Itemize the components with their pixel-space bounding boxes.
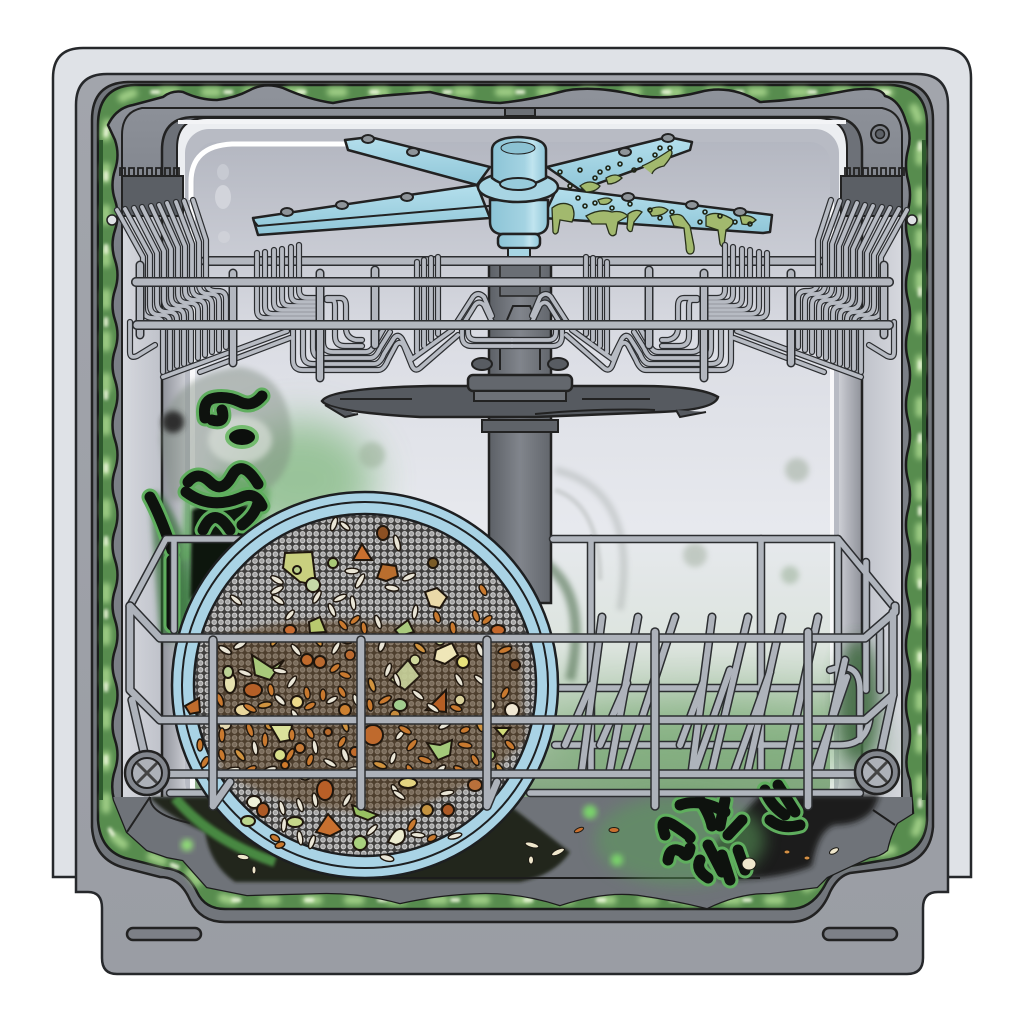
floor <box>112 795 912 910</box>
top right screw <box>871 125 889 143</box>
debris: large pieces <box>185 526 520 850</box>
floor food crumbs <box>237 826 840 874</box>
tub details inside clip <box>112 108 912 910</box>
upper left mold halo <box>150 367 292 640</box>
lower rack back and tines <box>130 539 893 793</box>
upper spray arm <box>253 134 772 260</box>
debris: orange and tan grains <box>197 583 516 850</box>
inner tub <box>108 85 913 908</box>
black mold strokes with green edge <box>150 396 800 880</box>
rear arms <box>345 137 490 185</box>
mesh <box>194 514 536 856</box>
green slime gasket <box>98 85 927 909</box>
cylinder <box>492 137 546 186</box>
top tab <box>505 108 535 116</box>
blue rim <box>172 492 558 878</box>
left wheel <box>125 751 169 795</box>
arm pegs <box>281 134 746 216</box>
slime drips <box>552 150 756 254</box>
front arms <box>253 185 490 235</box>
left side wall <box>122 200 162 800</box>
right comb hinge block <box>841 168 904 216</box>
debris: rice grains <box>226 516 487 863</box>
green haze <box>175 420 890 790</box>
inner seal band <box>92 82 933 922</box>
central mast <box>489 258 551 603</box>
window recess frame <box>160 116 864 175</box>
hub body <box>490 200 548 234</box>
strainer disc <box>172 492 558 878</box>
collar <box>478 172 558 202</box>
upper tub corner lines <box>121 107 903 175</box>
back wall window <box>162 118 862 806</box>
left foot slot <box>127 928 201 940</box>
lower spray arm <box>322 358 718 432</box>
right wheel <box>855 750 899 794</box>
left comb hinge block <box>120 168 183 216</box>
debris underlay <box>210 620 525 812</box>
right foot slot <box>823 928 897 940</box>
debris: extra orange and cream fillers <box>215 632 513 780</box>
lower rack front bars <box>130 606 895 806</box>
housing base with feet <box>76 74 948 974</box>
slime speckles <box>558 146 752 226</box>
upper dish rack <box>107 200 917 378</box>
outer door panel <box>53 48 971 877</box>
right side wall <box>862 200 902 800</box>
